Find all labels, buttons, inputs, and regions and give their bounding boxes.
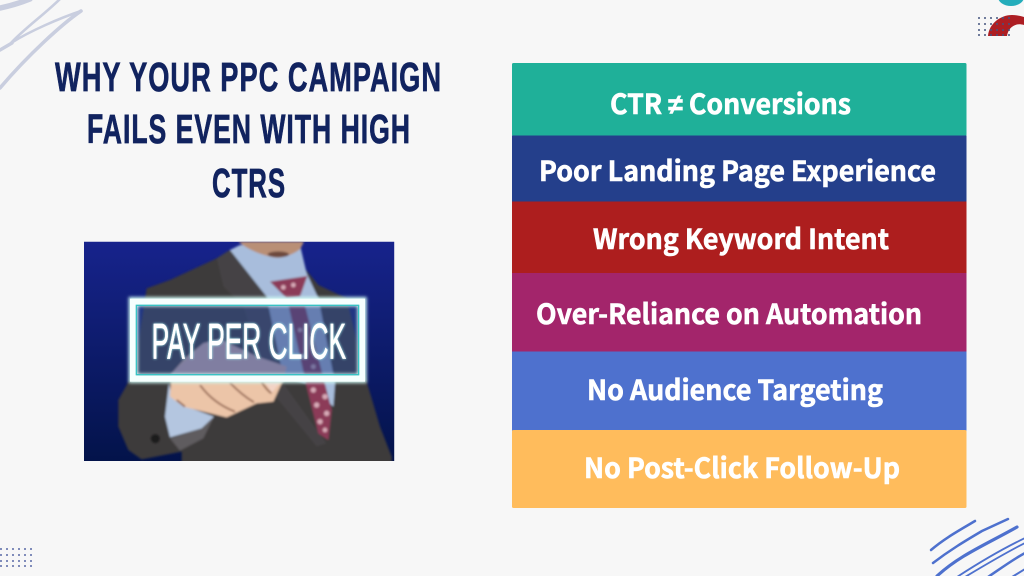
row: Poor Landing Page Experience: Poor Landing Page Experience xyxy=(539,150,936,190)
row: Over-Reliance on Automation xyxy=(512,273,966,352)
row: No Post-Click Follow-Up xyxy=(512,430,966,508)
row: CTR ≠ Conversions: CTR ≠ Conversions xyxy=(610,83,851,123)
photo: button panel xyxy=(133,302,362,379)
row: Over-Reliance on Automation: Over-Reliance on Automation xyxy=(536,293,922,333)
title xyxy=(55,54,442,206)
photo: shirt xyxy=(230,245,335,407)
row: No Post-Click Follow-Up: No Post-Click Follow-Up xyxy=(584,447,900,487)
title: WHY YOUR PPC CAMPAIGN xyxy=(55,54,442,100)
row: No Audience Targeting xyxy=(512,352,966,430)
title: CTRS xyxy=(212,160,286,206)
photo: shirt cuff xyxy=(165,383,214,437)
photo: lapels xyxy=(217,250,327,447)
row: Wrong Keyword Intent xyxy=(512,202,966,274)
decoration: top-right shapes xyxy=(978,0,1024,36)
row: Wrong Keyword Intent: Wrong Keyword Intent xyxy=(593,218,889,258)
row: Poor Landing Page Experience xyxy=(512,136,966,202)
photo: button panel: PAY PER CLICK xyxy=(152,313,346,369)
list: campaign failure reasons xyxy=(512,63,966,508)
photo: hand xyxy=(170,339,287,417)
photo: chin xyxy=(238,242,304,258)
title: FAILS EVEN WITH HIGH xyxy=(87,106,411,152)
row: CTR ≠ Conversions xyxy=(512,63,966,136)
decoration: top-left scribble xyxy=(0,0,81,88)
decoration: bottom-left dots xyxy=(0,548,32,567)
row: No Audience Targeting: No Audience Targeting xyxy=(587,369,883,409)
photo: necktie xyxy=(270,276,332,440)
decoration: bottom-right brush strokes xyxy=(931,519,1024,576)
photo: businessman pressing pay per click button xyxy=(84,242,394,463)
photo: suit jacket xyxy=(118,250,392,463)
